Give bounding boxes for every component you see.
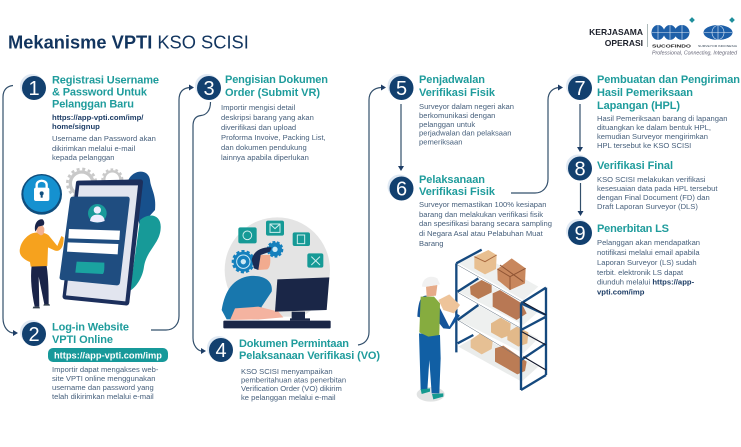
- desk: [223, 321, 331, 328]
- backdrop circle: [225, 217, 330, 323]
- step 3 body: dan dokumen pendukung: [221, 143, 307, 152]
- connector: step 6 to 7: [511, 84, 563, 193]
- step 3 body: deskripsi barang yang akan: [221, 113, 314, 122]
- title: Mekanisme VPTI KSO SCISI: [8, 32, 249, 52]
- phone frame: [63, 179, 143, 305]
- gears: [233, 252, 253, 272]
- step 4 badge: [207, 336, 233, 362]
- step 2 body: telah dikirimkan melalui e-mail: [52, 392, 154, 401]
- step 1 body: [52, 134, 156, 162]
- connector: step 2 to 3: [151, 84, 194, 330]
- step 8 badge: 8: [574, 158, 586, 180]
- step 2 body: Importir dapat mengakses web-: [52, 365, 159, 374]
- step 3 badge: 3: [203, 78, 215, 100]
- logo: kerjasama operasi: Professional, Connecting, Integrated: [652, 50, 738, 56]
- connector: step 1 to 2: [3, 86, 18, 336]
- step 1: [20, 74, 159, 162]
- step 9 body: vpti.com/imp: [597, 288, 645, 296]
- step 2 badge: 2: [28, 324, 40, 346]
- surveyor legs: [419, 333, 441, 393]
- step 3 heading: Pengisian Dokumen: [225, 74, 328, 86]
- step 6 badge: 6: [396, 178, 407, 200]
- teal icons: [238, 227, 257, 243]
- step 2 heading: Log-in Website: [52, 322, 129, 334]
- step 1 url: home/signup: [52, 122, 100, 131]
- lock badge: [21, 174, 62, 215]
- step 7 badge: [566, 74, 592, 100]
- step 8 body: [597, 175, 718, 211]
- step 6: [388, 174, 552, 248]
- step 6 badge: [388, 174, 414, 200]
- step 1 body: dikirimkan melalui e-mail: [52, 144, 135, 153]
- surveyor head and helmet: [426, 285, 437, 297]
- step 2: [20, 320, 168, 401]
- arrow: step 5 to 6: [398, 104, 404, 171]
- step 8 badge: [566, 154, 592, 180]
- step 9 body: notifikasi melalui email apabila: [597, 248, 700, 257]
- person: [253, 255, 270, 270]
- step 5 heading: Verifikasi Fisik: [419, 87, 496, 99]
- step 4 badge: 4: [215, 340, 227, 362]
- step 5 heading: Penjadwalan: [419, 74, 485, 86]
- step 6 body: Barang: [419, 239, 444, 248]
- step 5 body: pemeriksaan: [419, 138, 462, 146]
- step 6 heading: Verifikasi Fisik: [419, 186, 496, 198]
- illustration: warehouse surveyor and shelves: [417, 250, 546, 402]
- step 2 body: username dan password yang: [52, 383, 154, 392]
- step 5 body: berkomunikasi dengan: [419, 111, 495, 120]
- step 2 heading: [52, 322, 129, 346]
- step 4 body: pemberitahuan atas penerbitan: [241, 376, 346, 384]
- step 1 url: [52, 113, 144, 131]
- step 4 heading: Dokumen Permintaan: [239, 338, 349, 350]
- step 8 body: dengan Final Document (FD) dan: [597, 193, 710, 202]
- step 3 body: Proforma Invoive, Packing List,: [221, 133, 326, 142]
- man: [31, 265, 49, 307]
- step 8 body: kesesuaian data pada HPL tersebut: [597, 184, 718, 193]
- arrow: step 8 to 9: [578, 183, 584, 216]
- step 4 body: Verification Order (VO) dikirim: [241, 384, 342, 393]
- logo: kerjasama operasi: KERJASAMA: [589, 27, 643, 37]
- step 5 badge: 5: [396, 78, 407, 100]
- step 9 body: terbit. elektronik LS dapat: [597, 268, 684, 277]
- surveyor vest and arms: [417, 296, 460, 329]
- step 8 heading: Verifikasi Final: [597, 160, 673, 172]
- step 6 heading: Pelaksanaan: [419, 174, 485, 186]
- step 9: [566, 219, 700, 296]
- step 5: [388, 74, 514, 146]
- illustration: operator at computer: [220, 217, 333, 330]
- step 4 body: ke pelanggan melalui e-mail: [241, 393, 336, 402]
- step 6 heading: [419, 174, 496, 198]
- step 3 body: lainnya apabila diperlukan: [221, 153, 309, 162]
- step 2 heading: VPTI Online: [52, 334, 113, 346]
- step 9 body: Laporan Surveyor (LS) sudah: [597, 258, 697, 267]
- step 4 heading: Pelaksanaan Verifikasi (VO): [239, 350, 380, 362]
- step 8 body: KSO SCISI melakukan verifikasi: [597, 175, 706, 184]
- step 2 badge: [20, 320, 46, 346]
- phone screen: [66, 185, 138, 301]
- step 7 body: Hasil Pemeriksaan barang di lapangan: [597, 114, 727, 123]
- step 7: [566, 74, 740, 150]
- step 8 body: Draft Laporan Surveyor (DLS): [597, 202, 698, 211]
- step 9 badge: 9: [574, 223, 586, 245]
- step 7 badge: 7: [574, 78, 586, 100]
- step 7 heading: Pembuatan dan Pengiriman: [597, 74, 740, 86]
- connector: step 4 to 5: [358, 84, 386, 345]
- step 7 heading: Hasil Pemeriksaan: [597, 87, 693, 99]
- step 3 heading: Order (Submit VR): [225, 87, 320, 99]
- login card: [60, 197, 130, 285]
- shelf boards: [458, 253, 538, 300]
- step 1 heading: Pelanggan Baru: [52, 98, 134, 110]
- logo: kerjasama operasi: [589, 17, 738, 56]
- step 1 url: https://app-vpti.com/imp/: [52, 113, 144, 122]
- step 7 body: [597, 114, 727, 150]
- step 7 body: kemudian Surveyor mengirimkan: [597, 132, 708, 141]
- illustration: phone login with person: [20, 169, 161, 308]
- boxes: [474, 250, 497, 274]
- step 1 heading: [52, 74, 159, 110]
- step 1 heading: & Password Untuk: [52, 86, 148, 98]
- step 2 body: site VPTI online menggunakan: [52, 374, 155, 383]
- step 9 body: Pelanggan akan mendapatkan: [597, 238, 700, 247]
- step 5 heading: [419, 74, 496, 99]
- step 5 body: pelanggan untuk: [419, 120, 475, 129]
- step 2 body: [52, 365, 159, 401]
- form fields: [68, 229, 120, 240]
- submit button: [75, 262, 104, 274]
- step 3 body: [221, 103, 326, 162]
- step 3 body: Importir mengisi detail: [221, 103, 296, 112]
- step 5 body: Surveyor dalam negeri akan: [419, 102, 514, 111]
- step 4: [207, 336, 380, 402]
- logo: kerjasama operasi: SURVEYOR INDONESIA: [698, 44, 737, 48]
- step 2 url pill: https://app-vpti.com/imp: [54, 350, 162, 362]
- step 7 heading: [597, 74, 740, 112]
- arrow: step 7 to 8: [577, 104, 583, 152]
- step 6 body: barang dan melakukan verifikasi fisik: [419, 210, 543, 219]
- step 9 heading: Penerbitan LS: [597, 223, 669, 235]
- surveyor shadow: [417, 387, 445, 402]
- shelf frame: [456, 250, 546, 390]
- step 3: [195, 74, 328, 162]
- connector: step 3 to 4: [193, 102, 210, 354]
- step 1 badge: 1: [28, 78, 40, 100]
- step 8: [566, 154, 718, 211]
- step 3 body: diverifikasi dan upload: [221, 123, 296, 132]
- step 6 body: [419, 200, 552, 248]
- step 7 body: HPL tersebut ke KSO SCISI: [597, 141, 691, 150]
- step 4 body: [241, 367, 346, 402]
- avatar: [88, 204, 107, 223]
- step 5 body: [419, 102, 514, 146]
- step 4 heading: [239, 338, 380, 362]
- step 9 body: [597, 238, 700, 296]
- held box: [438, 294, 460, 313]
- leaves: [128, 172, 155, 227]
- step 7 heading: Lapangan (HPL): [597, 100, 680, 112]
- step 4 body: KSO SCISI menyampaikan: [241, 367, 333, 376]
- step 6 body: di Negara Asal atau Pelabuhan Muat: [419, 229, 544, 238]
- step 1 heading: Registrasi Username: [52, 74, 159, 86]
- monitor: [275, 277, 329, 312]
- gears: [67, 169, 122, 198]
- step 5 body: perjadwalan dan pelaksaan: [419, 128, 511, 138]
- logo: kerjasama operasi: OPERASI: [605, 38, 643, 48]
- step 1 body: Username dan Password akan: [52, 134, 156, 143]
- logo: kerjasama operasi: SUCOFINDO: [652, 44, 691, 50]
- step 6 body: Surveyor memastikan 100% kesiapan: [419, 200, 546, 209]
- step 3 heading: [225, 74, 328, 99]
- step 7 body: dituangkan ke dalam bentuk HPL,: [597, 123, 711, 132]
- step 9 body: diunduh melalui https://app-: [597, 278, 695, 286]
- step 6 body: dan spesifikasi barang secara sampling: [419, 219, 552, 228]
- step 1 body: kepada pelanggan: [52, 153, 114, 162]
